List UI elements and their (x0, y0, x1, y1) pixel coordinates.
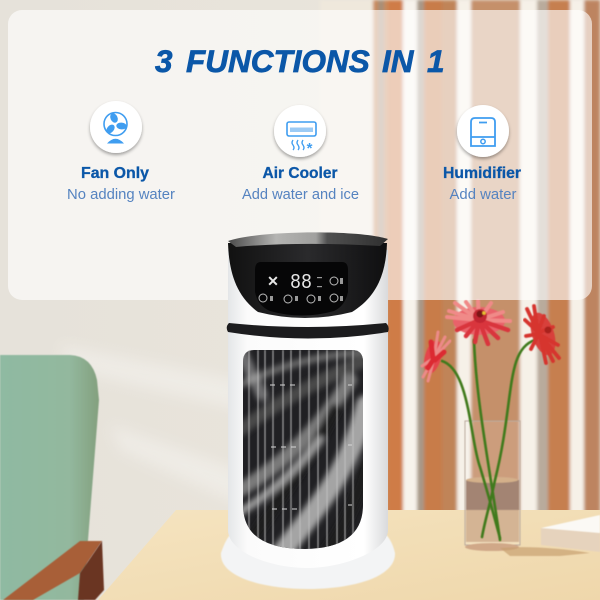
base (221, 528, 395, 589)
flowers in vase (421, 301, 590, 556)
chair arm side (78, 541, 104, 600)
book (541, 515, 600, 552)
black collar ring (227, 323, 389, 338)
icon: humidifier (457, 105, 509, 157)
flower: left (421, 332, 450, 381)
tower fan (221, 232, 395, 589)
label: Air Cooler (262, 165, 338, 182)
sublabel: Add water (450, 187, 517, 203)
air stream highlights (60, 345, 240, 505)
black control head (228, 243, 387, 318)
lid (228, 232, 388, 247)
stems (442, 340, 535, 540)
touch buttons (259, 277, 338, 303)
sublabel: No adding water (67, 187, 175, 203)
icon: fan (90, 101, 142, 153)
control panel (255, 262, 348, 316)
fan body (228, 250, 388, 568)
title: 1 (427, 43, 445, 79)
function: fan only (67, 101, 175, 203)
chair arm (3, 541, 102, 600)
flower: right (525, 306, 560, 363)
fan glyph: ✕ (267, 273, 279, 289)
label: Fan Only (81, 165, 149, 182)
curtain (320, 0, 600, 520)
sublabel: Add water and ice (242, 187, 359, 203)
flower: centre (447, 301, 510, 344)
vase (465, 421, 590, 556)
armchair (0, 355, 104, 600)
grille (243, 350, 363, 549)
button labels (270, 277, 343, 301)
function: humidifier (443, 105, 521, 203)
label: Humidifier (443, 165, 521, 182)
title: IN (382, 43, 415, 79)
icon: air conditioner: * (307, 140, 313, 157)
translucent top panel (8, 10, 592, 300)
chair back (0, 355, 99, 600)
vertical bars (249, 350, 353, 550)
table (98, 510, 600, 600)
cross ties (270, 385, 352, 509)
function: air cooler (242, 105, 359, 203)
title: 3 (155, 43, 173, 79)
digits: 88 (290, 272, 312, 295)
air swooshes (243, 350, 363, 549)
title: FUNCTIONS (186, 43, 370, 79)
